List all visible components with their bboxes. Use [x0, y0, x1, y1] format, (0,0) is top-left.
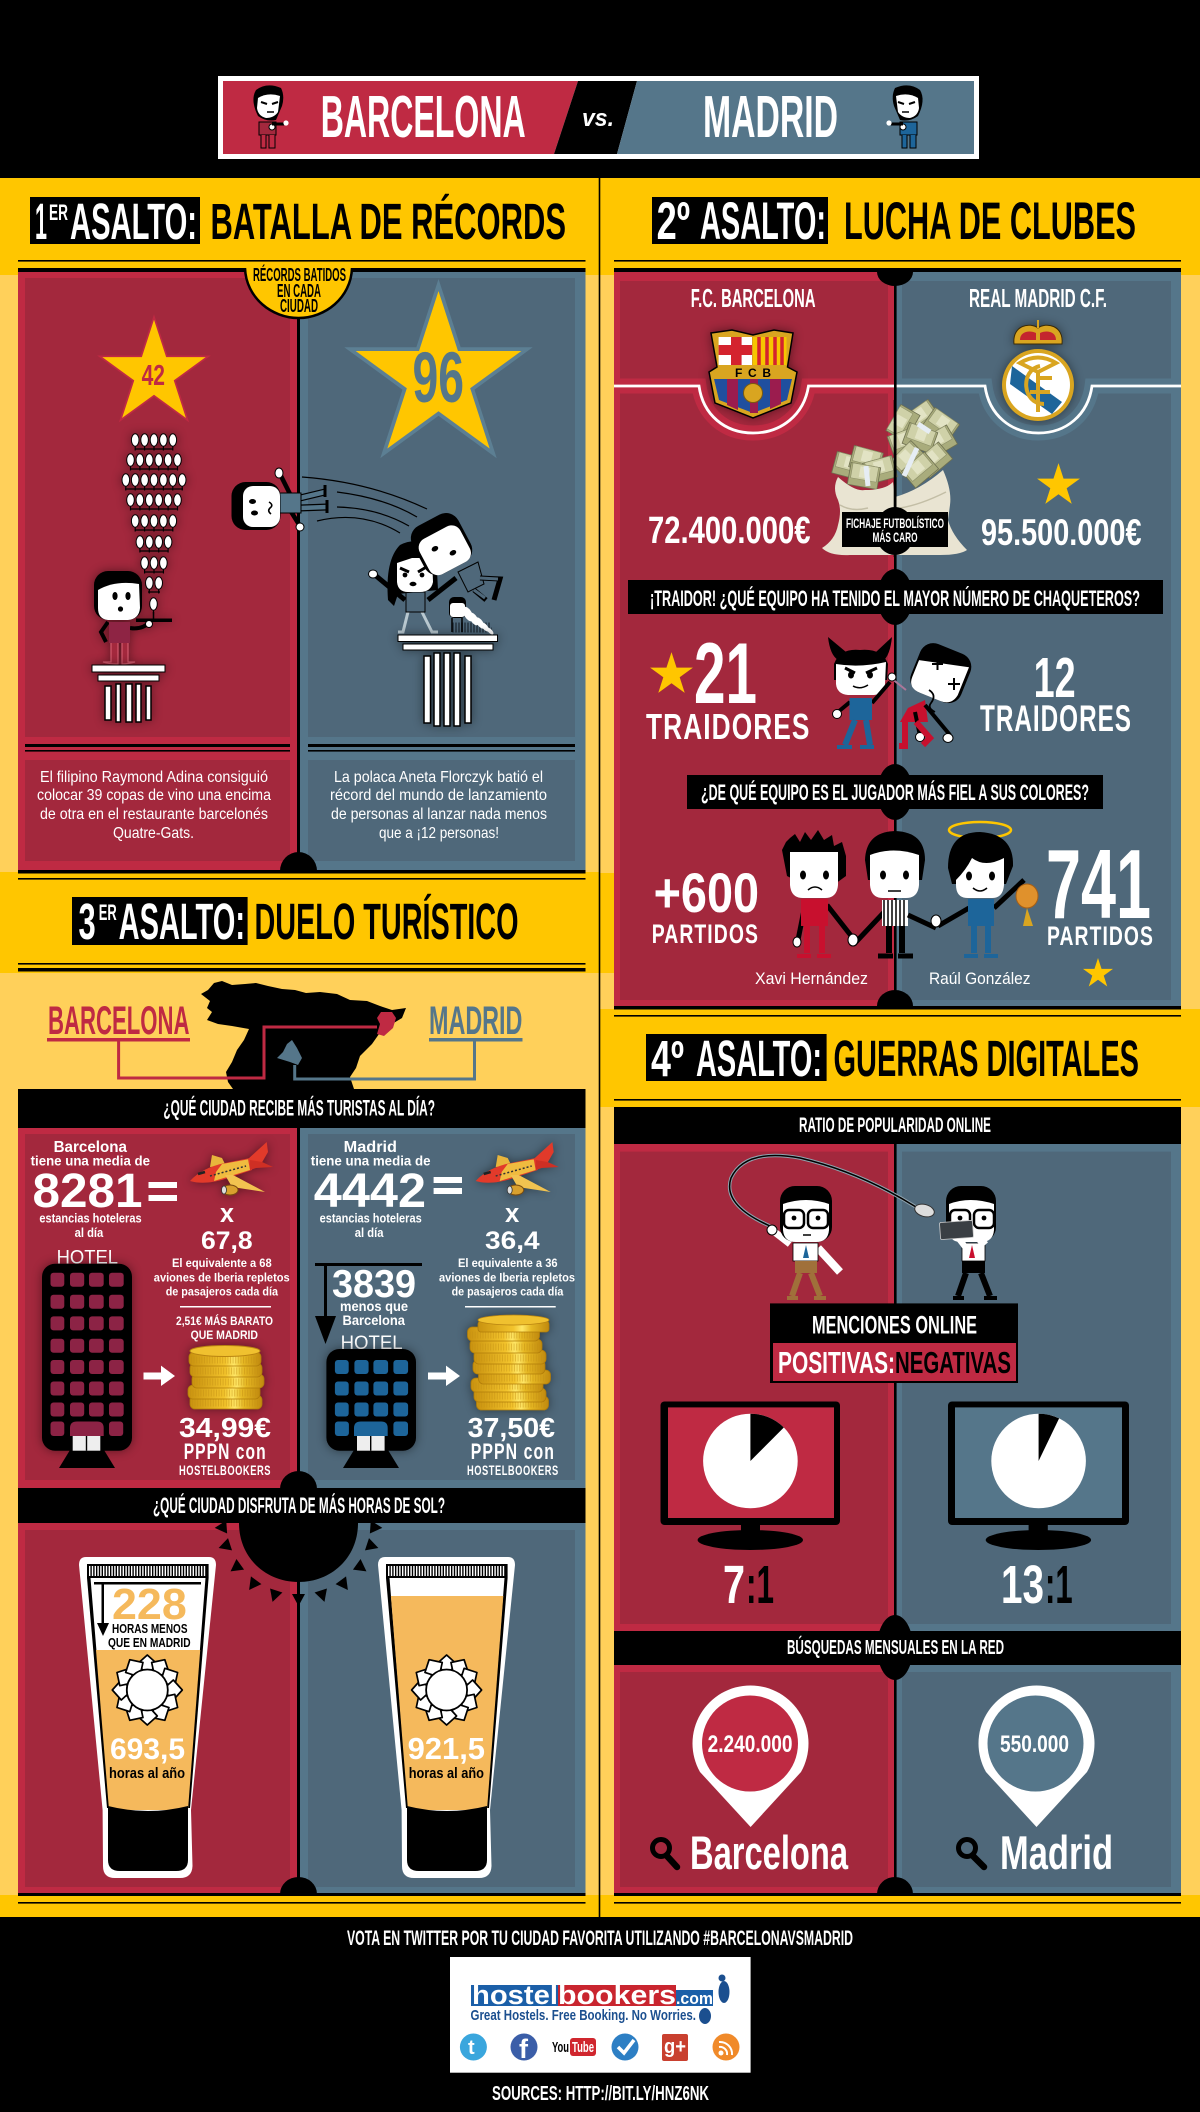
heading: 3er asalto: ER: [99, 900, 117, 925]
title: Barcelona: BARCELONA: [321, 84, 526, 150]
header banner: [218, 76, 979, 159]
heading: 3er asalto: 3: [78, 893, 96, 950]
block: Madrid stays: 4442: [314, 1165, 426, 1218]
block: 3839 fewer than Barcelona: [315, 1263, 422, 1344]
block: Barcelona planes: x: [220, 1198, 234, 1228]
icon: Madrid hotel: [326, 1333, 416, 1468]
icon: Xavi, referee and Raúl: [782, 822, 1038, 956]
block: Madrid planes: [439, 1198, 575, 1308]
icon: tower of wine glasses: [122, 434, 186, 620]
icon: plane Madrid: [476, 1142, 559, 1195]
block: Barcelona stays: 8281: [32, 1165, 142, 1218]
icon: Madrid pin: [978, 1685, 1094, 1827]
icon: equals sign: [148, 1182, 177, 1201]
number: 95.500.000: 95.500.000€: [981, 512, 1142, 553]
number: +600 matches: PARTIDOS: [652, 919, 759, 949]
icon: Barcelona hotel: [42, 1248, 132, 1468]
text: club names: [691, 283, 1107, 313]
text: club names: REAL MADRID C.F.: [969, 283, 1107, 313]
block: Barcelona stays: al día: [75, 1225, 104, 1240]
label: Madrid with leader: [295, 999, 522, 1079]
box: online mentions legend: MENCIONES ONLINE: [812, 1312, 977, 1340]
icon: money bag: [822, 399, 967, 557]
bar: sun question: ¿QUÉ CIUDAD DISFRUTA DE MÁS HORAS DE SOL?: [153, 1493, 445, 1518]
bar: tourists question: ¿QUÉ CIUDAD RECIBE MÁS TURISTAS AL DÍA?: [163, 1096, 435, 1121]
block: Madrid stays: al día: [355, 1225, 384, 1240]
block: 3839 fewer than Barcelona: menos que: [340, 1298, 408, 1314]
star: 42 records: 42: [142, 360, 165, 392]
number: +600 matches: [652, 861, 759, 949]
number: 12 traitors: 12: [1034, 646, 1076, 710]
block: Barcelona planes: El equivalente a 68: [172, 1256, 272, 1270]
icon: Madrid hotel: HOTEL: [341, 1333, 403, 1354]
icon: waiter on pedestal: [94, 571, 172, 664]
text: Madrid record: de personas al lanzar nada menos: [331, 806, 547, 823]
logo: hostelbookers: .com: [676, 1989, 713, 2008]
arrow: hotel to price: [144, 1366, 175, 1386]
icon: angry Madrid boxer: [886, 85, 923, 148]
block: Madrid planes: El equivalente a 36: [458, 1256, 558, 1270]
star: 42 records: [100, 317, 208, 420]
number: 72.400.000: 72.400.000€: [648, 510, 810, 552]
block: Barcelona stays: tiene una media de: [31, 1153, 150, 1169]
logo: hostelbookers: hostel: [472, 1980, 558, 2010]
block: Barcelona price: PPPN con: [184, 1439, 267, 1464]
bar: monthly searches: [614, 1615, 1181, 1680]
number: 12 traitors: [980, 646, 1132, 739]
arrow: Madrid hotel to price: [428, 1366, 460, 1386]
block: Barcelona price: 34,99€: [179, 1412, 271, 1443]
box: online mentions legend: NEGATIVAS: [895, 1345, 1011, 1380]
title: Madrid: MADRID: [703, 84, 838, 150]
text: Madrid record: récord del mundo de lanzamiento: [330, 787, 547, 804]
icon: Barcelona sunscreen tube: 228: [112, 1580, 187, 1629]
motion lines: [302, 477, 427, 533]
icon: FC Barcelona crest: [709, 330, 797, 418]
text: Barcelona search: Barcelona: [690, 1826, 849, 1879]
money stacks: [832, 399, 960, 489]
block: Madrid stays: tiene una media de: [311, 1153, 431, 1169]
block: Madrid planes: 36,4: [485, 1227, 540, 1255]
block: Madrid planes: de pasajeros cada día: [452, 1285, 564, 1299]
icon: google plus: g+: [664, 2036, 686, 2058]
icon: Real Madrid crest: [1002, 320, 1074, 421]
heading: 3er asalto: DUELO TURÍSTICO: [254, 893, 518, 950]
block: Barcelona planes: de pasajeros cada día: [166, 1285, 278, 1299]
icon: Barcelona sunscreen tube: 693,5: [110, 1733, 185, 1766]
bar: online popularity: RATIO DE POPULARIDAD ONLINE: [799, 1114, 991, 1137]
icon: equals sign Madrid: [434, 1177, 462, 1194]
number: 13:1 ratio: 13: [1001, 1555, 1044, 1615]
block: Barcelona stays: Barcelona: [54, 1139, 127, 1156]
block: Madrid planes: x: [505, 1198, 519, 1228]
icon: Barcelona sunscreen tube: [79, 1557, 216, 1878]
star: 96 records: 96: [412, 339, 464, 418]
heading: 1er asalto: 1: [35, 193, 47, 250]
text: Twitter vote call: VOTA EN TWITTER POR TU CIUDAD FAVORITA UTILIZANDO #BARCELONAVSMADRID: [347, 1927, 853, 1950]
number: 7:1 ratio: [723, 1555, 774, 1615]
logo: hostelbookers: [470, 1974, 730, 2024]
label: most expensive signing: [842, 512, 948, 547]
text: Barcelona record: [37, 769, 271, 842]
text: Barcelona record: El filipino Raymond Adina consiguió: [40, 769, 268, 786]
text: Madrid record: La polaca Aneta Florczyk batió el: [334, 769, 543, 786]
icon: rss: [712, 2034, 740, 2060]
block: Barcelona stays: [31, 1139, 150, 1240]
block: Barcelona planes: 2,51€ MÁS BARATO: [176, 1313, 273, 1328]
label: Barcelona with leader: BARCELONA: [48, 999, 190, 1043]
bar: sun question: [18, 1488, 586, 1523]
number: +600 matches: +600: [654, 861, 759, 924]
box: online mentions legend: POSITIVAS:: [778, 1345, 895, 1380]
icon: magnifier Barcelona: [652, 1840, 677, 1867]
icon: woman throwing people: [368, 508, 500, 632]
heading: 4º asalto: [646, 1030, 1139, 1087]
block: Madrid price: HOSTELBOOKERS: [467, 1462, 559, 1478]
badge: records per city: CIUDAD: [280, 296, 318, 316]
badge: records per city: RÉCORDS BATIDOS: [253, 264, 346, 285]
number: 21 traitors: [646, 626, 810, 747]
block: Barcelona planes: aviones de Iberia repletos: [154, 1271, 290, 1285]
icon: facebook: [510, 2034, 538, 2064]
icon: Barcelona hotel: HOTEL: [57, 1248, 118, 1269]
heading: 1er asalto: ER: [49, 200, 68, 225]
icon: flying person: [232, 468, 327, 531]
icon: black sun half disc: [214, 1521, 383, 1606]
icon: Barcelona sunscreen tube: QUE EN MADRID: [108, 1635, 191, 1650]
block: Barcelona price: [179, 1412, 271, 1478]
star: 96 records: [350, 285, 527, 453]
icon: Barcelona sunscreen tube: HORAS MENOS: [112, 1621, 188, 1636]
star: winner transfer: [1037, 463, 1080, 504]
text: Barcelona record: colocar 39 copas de vino una encima: [37, 787, 271, 804]
panel: round 1: [18, 193, 586, 880]
icon: Madrid sunscreen tube: 921,5: [408, 1731, 485, 1766]
text: vs: vs.: [582, 105, 614, 132]
icon: nerd with mouse whip: [730, 1156, 936, 1298]
icon: foursquare: [612, 2034, 638, 2060]
icon: Barcelona monitor with pie: [660, 1402, 840, 1550]
box: online mentions legend: [770, 1303, 1018, 1383]
label: Barcelona with leader: [47, 999, 377, 1078]
panel: round 4: [614, 1030, 1181, 1904]
icon: youtube: Tube: [572, 2039, 594, 2056]
icon: Barcelona coin stack: [188, 1346, 264, 1409]
icon: FC Barcelona crest: FCB: [735, 366, 771, 380]
number: 7:1 ratio: :1: [746, 1555, 774, 1615]
bar: online popularity: [614, 1107, 1181, 1144]
icon: twitter: t: [468, 2037, 475, 2059]
icon: blue pedestal: [398, 635, 498, 726]
star: loyalty winner: [1083, 958, 1113, 987]
icon: magnifier Madrid: [958, 1840, 984, 1867]
panel: round 3: [18, 893, 586, 1904]
logo: hostelbookers: bookers: [558, 1980, 676, 2010]
block: Barcelona planes: 67,8: [201, 1227, 253, 1255]
number: 13:1 ratio: :1: [1045, 1555, 1073, 1615]
card: HostelBookers logo and social icons: [450, 1957, 751, 2073]
number: 21 traitors: TRAIDORES: [646, 706, 810, 747]
block: Barcelona price: HOSTELBOOKERS: [179, 1462, 271, 1478]
icon: golden trophy: [1016, 884, 1038, 926]
block: 3839 fewer than Barcelona: 3839: [332, 1263, 416, 1306]
icon: nerd hit by keyboard: [939, 1186, 997, 1298]
bar: monthly searches: BÚSQUEDAS MENSUALES EN LA RED: [787, 1635, 1004, 1659]
icon: facebook: f: [519, 2034, 529, 2064]
block: Madrid planes: aviones de Iberia repletos: [439, 1271, 575, 1285]
badge: records per city: [245, 264, 352, 318]
number: 7:1 ratio: 7: [723, 1555, 745, 1615]
icon: Barcelona pin: 2.240.000: [708, 1731, 792, 1758]
block: Madrid stays: [311, 1139, 431, 1240]
heading: 1er asalto: [30, 193, 566, 250]
text: Madrid search: Madrid: [1000, 1826, 1113, 1879]
badge: records per city: EN CADA: [277, 281, 321, 301]
icon: youtube: You: [552, 2039, 569, 2056]
icon: Madrid sunscreen tube: horas al año: [409, 1765, 484, 1782]
label: Madrid with leader: MADRID: [429, 999, 522, 1043]
icon: Madrid sunscreen tube: [378, 1557, 515, 1878]
text: Barcelona record: Quatre-Gats.: [113, 825, 194, 842]
heading: 3er asalto: ASALTO:: [119, 893, 245, 950]
icon: small thrown people row: [449, 597, 495, 636]
icon: Madrid monitor with pie: [948, 1402, 1129, 1550]
number: 741 matches: PARTIDOS: [1047, 921, 1154, 951]
heading: 2º asalto: 2º: [657, 192, 690, 251]
label: most expensive signing: MÁS CARO: [872, 529, 918, 545]
block: Barcelona stays: estancias hoteleras: [39, 1210, 142, 1225]
heading: 1er asalto: ASALTO:: [70, 193, 197, 250]
number: 21 traitors: 21: [694, 626, 757, 722]
icon: stabbed victim: [899, 639, 976, 746]
icon: plane: [190, 1142, 273, 1195]
block: Barcelona planes: QUE MADRID: [191, 1328, 258, 1342]
label: most expensive signing: FICHAJE FUTBOLÍSTICO: [846, 515, 944, 531]
block: Madrid price: [467, 1412, 559, 1478]
heading: 4º asalto: 4º: [651, 1030, 684, 1087]
icon: youtube: [552, 2038, 596, 2056]
bar: tourists question: [18, 1089, 586, 1128]
icon: Barcelona sunscreen tube: horas al año: [109, 1765, 185, 1782]
icon: Madrid coin stack: [468, 1315, 550, 1410]
text: sources: SOURCES: HTTP://BIT.LY/HNZ6NK: [492, 2083, 709, 2105]
icon: devil with knife: [828, 637, 906, 747]
heading: 3er asalto: [72, 893, 518, 950]
block: Madrid stays: estancias hoteleras: [320, 1210, 422, 1225]
icon: Barcelona pin: [692, 1685, 808, 1827]
bar: loyalty question: [687, 764, 1103, 820]
logo: hostelbookers: Great Hostels. Free Booking. No Worries.: [470, 2007, 696, 2024]
icon: twitter: [460, 2034, 487, 2060]
icon: Madrid pin: 550.000: [1000, 1731, 1069, 1758]
icon: angry Barcelona boxer: [253, 85, 289, 148]
text: Barcelona record: de otra en el restaurante barcelonés: [40, 806, 268, 823]
icon: red pedestal: [92, 665, 165, 722]
bar: traitor question: [628, 569, 1163, 625]
panel: round 2: [614, 192, 1181, 1017]
number: 741 matches: [1046, 829, 1154, 951]
block: Barcelona planes: [154, 1198, 290, 1342]
text: club names: F.C. BARCELONA: [691, 283, 816, 313]
text: Xavi name: Xavi Hernández: [755, 969, 868, 988]
block: Madrid price: 37,50€: [468, 1412, 555, 1443]
block: 3839 fewer than Barcelona: Barcelona: [342, 1312, 405, 1328]
map: Spain: [201, 981, 406, 1089]
center divider: [599, 178, 600, 1917]
heading: 2º asalto: ASALTO:: [700, 192, 826, 251]
block: Madrid price: PPPN con: [471, 1439, 555, 1464]
heading: 1er asalto: BATALLA DE RÉCORDS: [210, 193, 566, 250]
heading: 4º asalto: ASALTO:: [696, 1030, 822, 1087]
block: Madrid stays: Madrid: [344, 1139, 397, 1156]
text: Madrid record: [330, 769, 547, 842]
text: Raúl name: Raúl González: [929, 969, 1030, 988]
star: traitors winner: [650, 652, 693, 693]
text: Madrid record: que a ¡12 personas!: [379, 825, 499, 842]
heading: 2º asalto: [652, 192, 1136, 251]
